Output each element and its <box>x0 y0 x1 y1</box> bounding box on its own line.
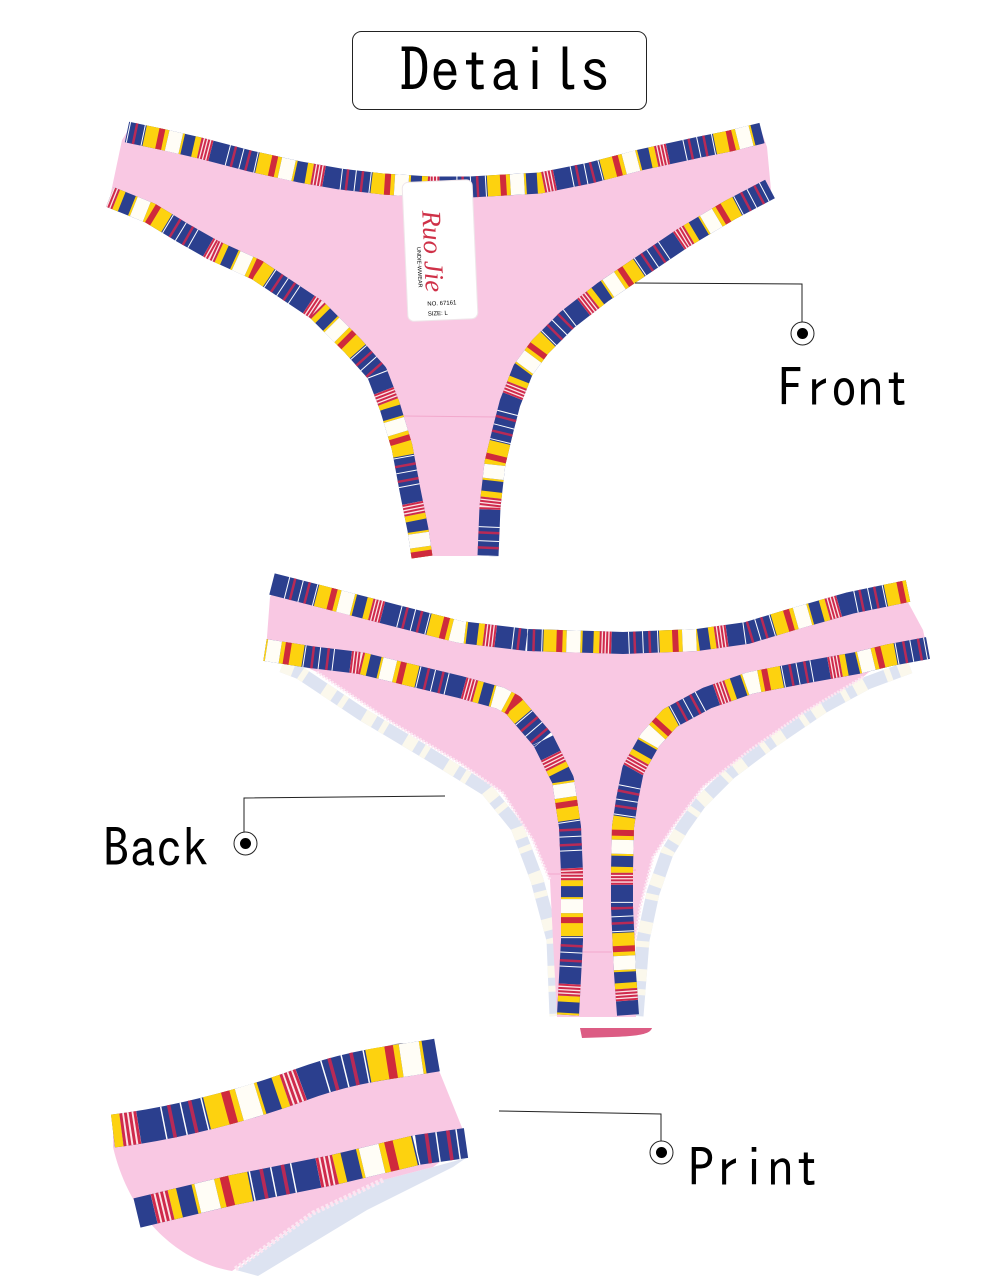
callout: print: Print <box>688 1141 820 1194</box>
front fabric <box>110 132 771 556</box>
back stitching <box>317 672 863 940</box>
panel: front view garment <box>110 132 771 557</box>
back waistband stripes <box>272 584 908 643</box>
panel: back view garment <box>265 584 928 1038</box>
product tag: UNDIE-WWEAR <box>415 247 423 288</box>
back left lining <box>282 666 556 1016</box>
product tag: SIZE: L <box>428 311 449 318</box>
product tag: Ruo Jie <box>416 209 450 293</box>
callout: back: Back <box>103 821 209 874</box>
front waistband stripes <box>127 132 762 187</box>
back right leg stripes <box>622 648 928 1015</box>
panel: print close-up <box>113 1044 466 1276</box>
product tag: NO. 67161 <box>427 300 457 308</box>
title <box>352 32 646 110</box>
back fabric <box>266 585 927 1017</box>
close-up top stripes <box>113 1055 437 1131</box>
front left leg stripes <box>110 197 422 557</box>
close-up lining <box>236 1158 466 1276</box>
back left leg stripes <box>265 650 572 1015</box>
callout: front: Front <box>778 361 910 414</box>
callout: front <box>635 283 910 414</box>
product tag <box>402 180 478 322</box>
callout: back <box>103 796 445 874</box>
callout: print <box>499 1111 820 1194</box>
title: Details <box>400 40 610 100</box>
close-up fabric <box>113 1058 466 1271</box>
underside pink edge <box>580 1028 652 1038</box>
front right leg stripes <box>488 189 770 556</box>
close-up lower stripes <box>137 1143 466 1213</box>
back right lining <box>637 667 910 1016</box>
